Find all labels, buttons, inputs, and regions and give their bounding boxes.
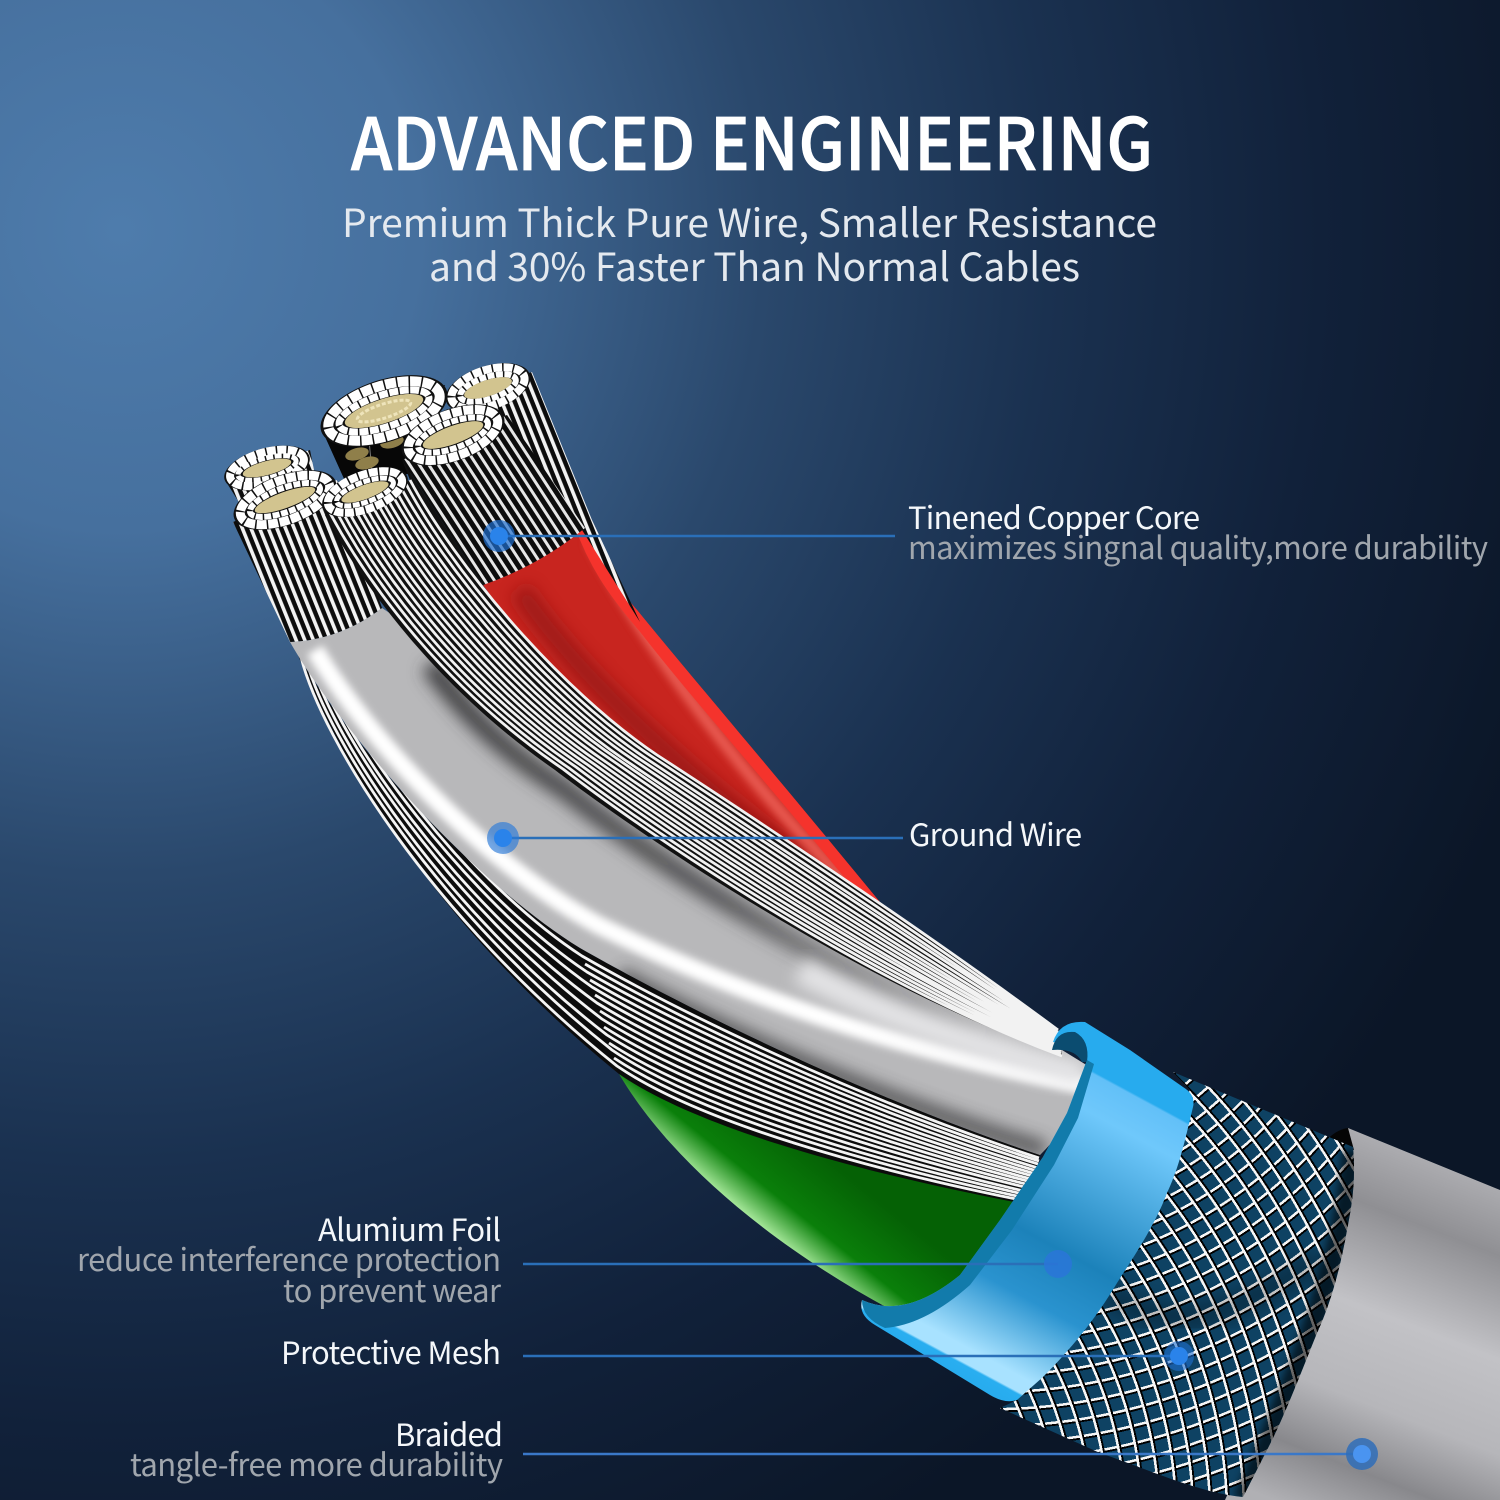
strand end cap: right front (393, 392, 513, 478)
green wire (619, 1074, 1040, 1312)
upper strand bundle (325, 480, 1062, 1056)
callout: tinned copper core: maximizes singnal quality,more durability (908, 523, 1488, 568)
subtitle (342, 193, 1157, 293)
front left strand bundle (233, 480, 382, 642)
cable illustration (219, 353, 1500, 1500)
right front strand bundle (402, 415, 585, 585)
red wire (483, 530, 880, 902)
callout: protective mesh (281, 1328, 1194, 1373)
white sheath (280, 600, 1100, 1170)
callout: protective mesh: Protective Mesh (281, 1328, 501, 1373)
center core black end (322, 385, 445, 492)
lower strand bundle (298, 655, 1040, 1205)
callout: ground wire: Ground Wire (909, 810, 1082, 855)
callout: braided (130, 1410, 1378, 1485)
subtitle: and 30% Faster Than Normal Cables (429, 237, 1080, 293)
callout: tinned copper core (483, 493, 1488, 568)
callout: aluminium foil: reduce interference protection (77, 1235, 501, 1280)
callout: ground wire (487, 810, 1082, 855)
callout: aluminium foil (77, 1205, 1072, 1311)
callout: braided: tangle-free more durability (130, 1440, 503, 1485)
blue aluminium foil ring (861, 1022, 1194, 1401)
callout: aluminium foil: to prevent wear (283, 1266, 502, 1311)
protective mesh (1000, 1072, 1354, 1497)
back right strand bundle (447, 372, 640, 622)
subtitle: Premium Thick Pure Wire, Smaller Resistance (342, 193, 1157, 249)
title: ADVANCED ENGINEERING (351, 86, 1153, 191)
strand end cap: rear left (219, 437, 315, 499)
rear left strand stub (225, 450, 320, 520)
strand end cap: center (312, 361, 456, 461)
strand end cap: back right (439, 353, 537, 423)
callout: aluminium foil: Alumium Foil (318, 1205, 501, 1250)
callout: tinned copper core: Tinened Copper Core (908, 493, 1200, 538)
outer gray jacket (1225, 1128, 1500, 1500)
strand end cap: front middle (316, 457, 414, 527)
dark gap between bundles (402, 460, 545, 680)
strand end cap: front left (226, 458, 344, 542)
callout: braided: Braided (395, 1410, 503, 1455)
